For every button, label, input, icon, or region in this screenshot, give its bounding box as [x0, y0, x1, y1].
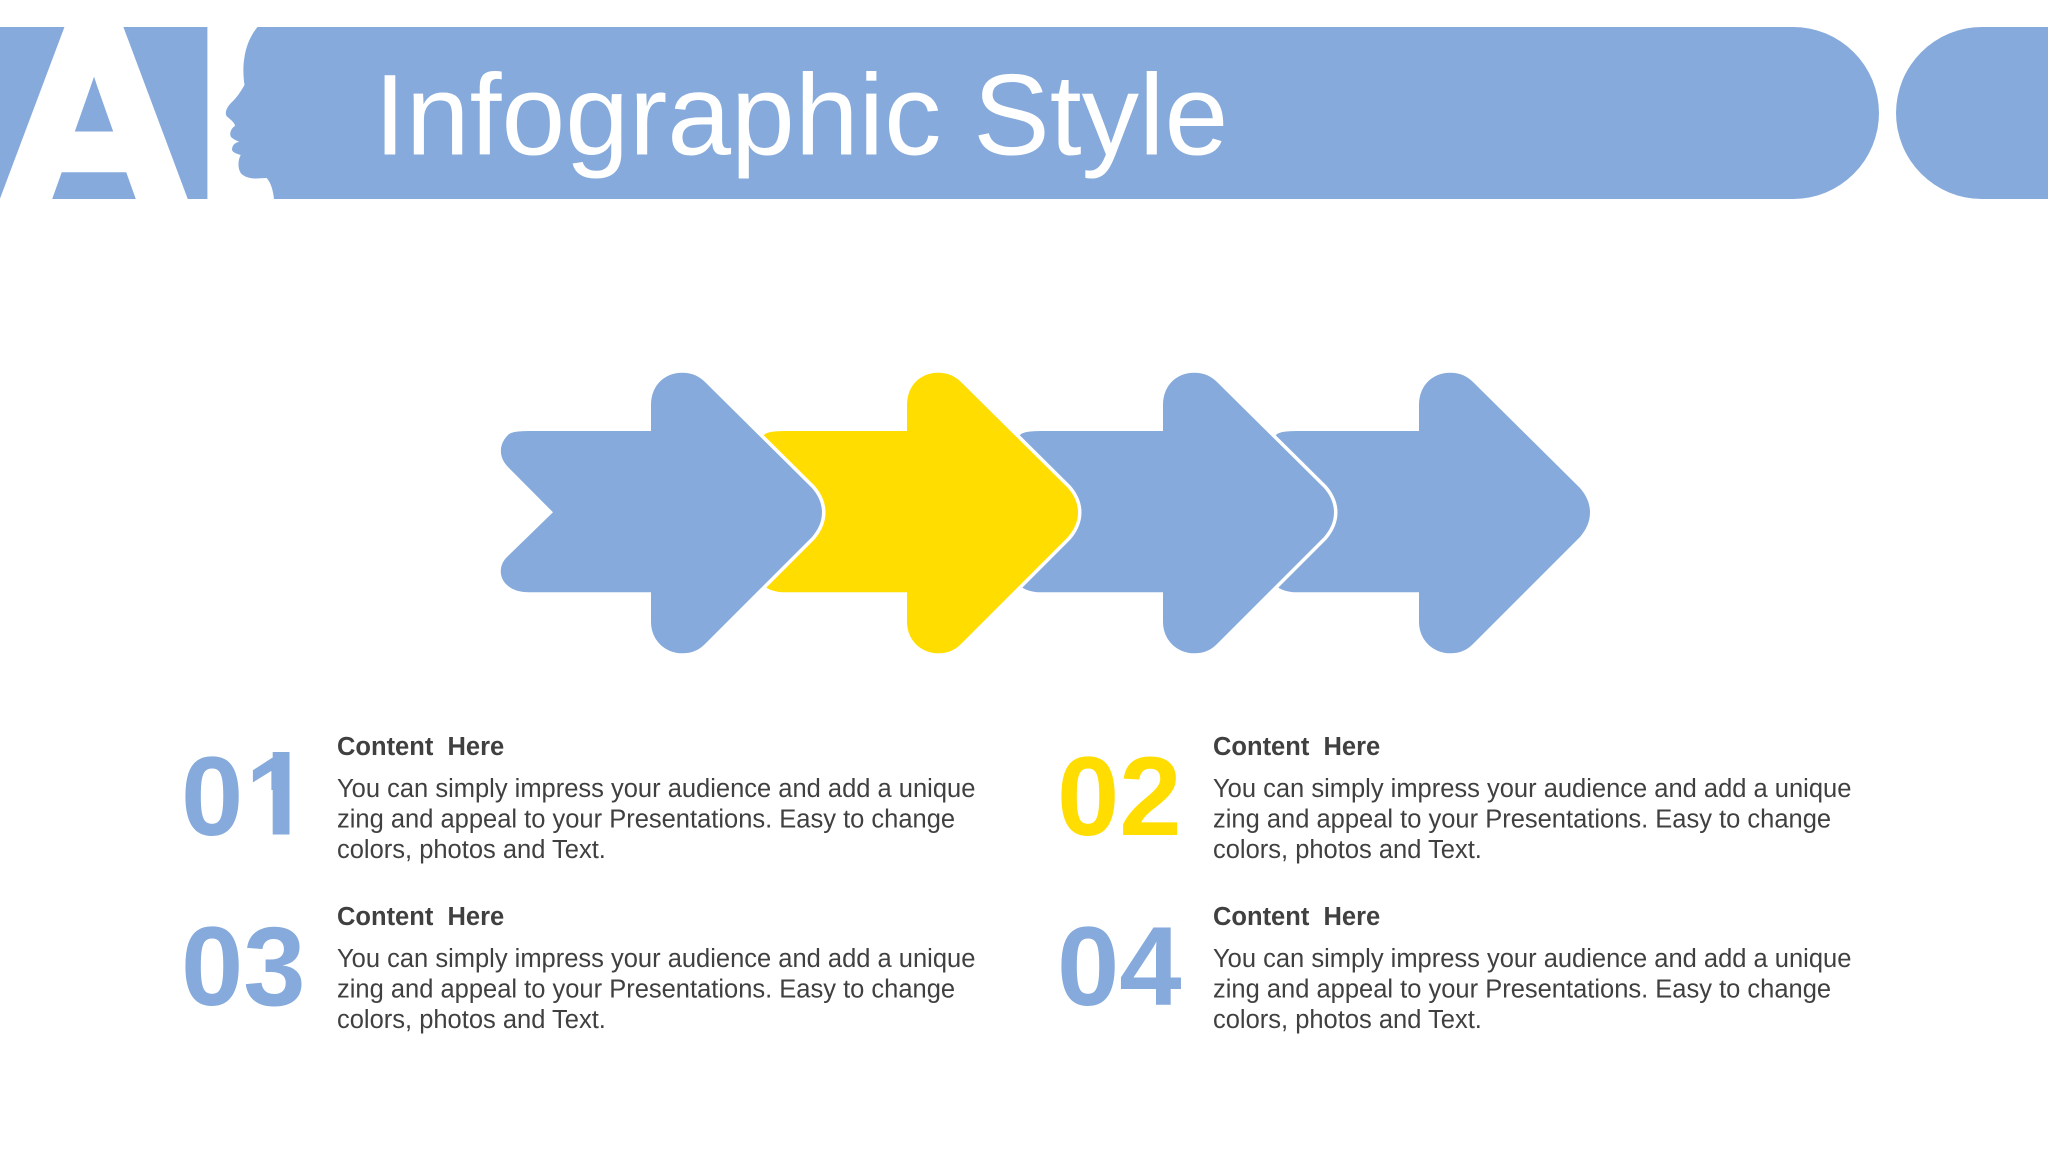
item 03: [181, 903, 975, 1034]
body 03: You can simply impress your audience and add a unique: [337, 945, 975, 973]
body 01: You can simply impress your audience and add a unique: [337, 775, 975, 803]
body 01: colors, photos and Text.: [337, 836, 606, 864]
arrow chain: [501, 373, 1590, 653]
body 02: zing and appeal to your Presentations. Easy to change: [1213, 806, 1831, 834]
number 02: 02: [1057, 734, 1182, 859]
heading 03: Content Here: [337, 903, 504, 931]
arrow 1: [501, 373, 822, 653]
AI lettering with face profile: [0, 27, 274, 199]
item 01: [181, 733, 975, 864]
body 02: colors, photos and Text.: [1213, 836, 1482, 864]
body 04: zing and appeal to your Presentations. Easy to change: [1213, 976, 1831, 1004]
body 04: colors, photos and Text.: [1213, 1006, 1482, 1034]
item 04: [1057, 903, 1851, 1034]
number 01: 0: [181, 734, 243, 859]
item 02: [1057, 733, 1851, 864]
number 04: 04: [1057, 904, 1182, 1029]
number 01: [185, 752, 290, 836]
banner right pill: [1896, 27, 2048, 199]
heading 04: Content Here: [1213, 903, 1380, 931]
white backing behind the face: [254, 27, 274, 199]
body 04: You can simply impress your audience and add a unique: [1213, 945, 1851, 973]
header banner: [0, 27, 2048, 199]
body 03: colors, photos and Text.: [337, 1006, 606, 1034]
arrow 4: [1269, 373, 1590, 653]
number 03: 03: [181, 904, 306, 1029]
arrow 2: [757, 373, 1078, 653]
banner main bar: [0, 27, 1879, 199]
number 01: 1: [245, 734, 308, 859]
arrow 3: [1013, 373, 1334, 653]
heading 02: Content Here: [1213, 733, 1380, 761]
heading 01: Content Here: [337, 733, 504, 761]
title: Infographic Style: [374, 52, 1228, 180]
body 02: You can simply impress your audience and add a unique: [1213, 775, 1851, 803]
body 03: zing and appeal to your Presentations. Easy to change: [337, 976, 955, 1004]
face profile: [226, 27, 278, 199]
body 01: zing and appeal to your Presentations. Easy to change: [337, 806, 955, 834]
